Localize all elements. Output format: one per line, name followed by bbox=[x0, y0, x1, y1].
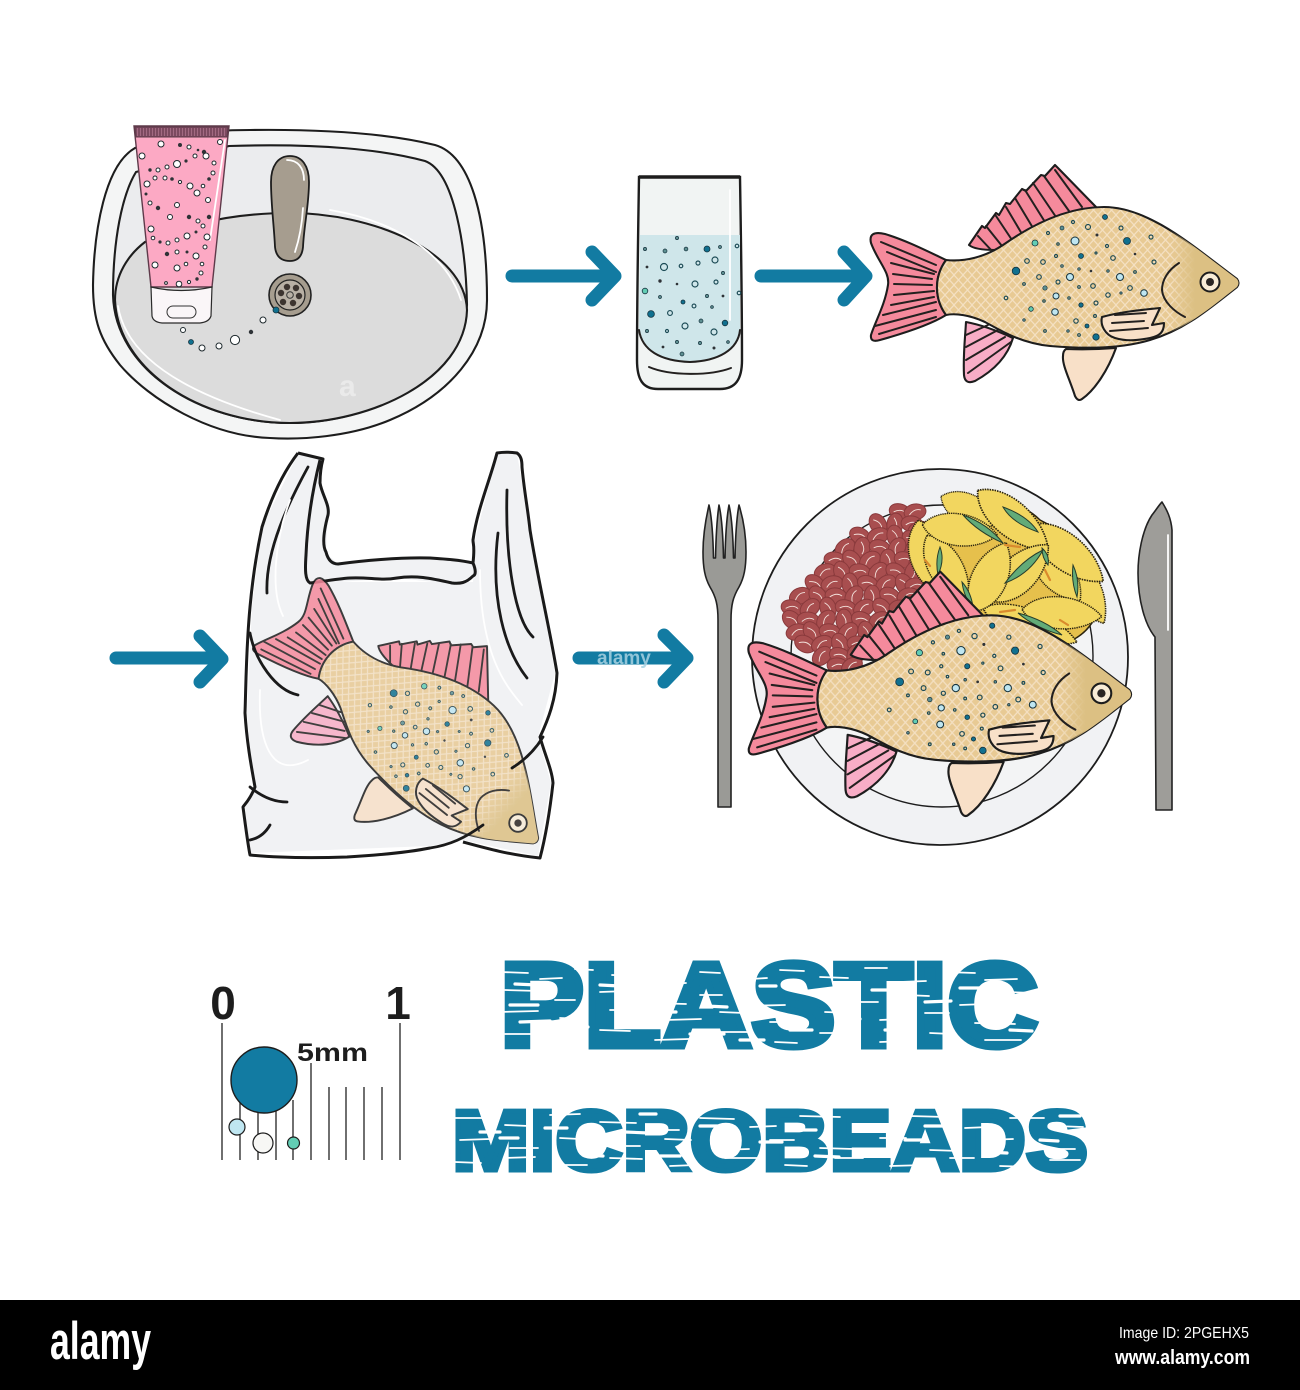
bag handle cut-out bbox=[320, 450, 497, 564]
bag outline bbox=[243, 452, 557, 858]
scale tick lines bbox=[222, 1023, 400, 1160]
plate bbox=[752, 469, 1128, 845]
title bbox=[452, 939, 1088, 1189]
knife bbox=[1138, 502, 1172, 810]
glass beads bbox=[642, 236, 741, 356]
size scale: 0 to 1 with 5mm mark bbox=[210, 977, 411, 1160]
panel: sink with exfoliating tube bbox=[93, 126, 487, 439]
drain bbox=[269, 274, 311, 316]
faucet handle bbox=[271, 156, 309, 261]
arrow: fish to plastic bag bbox=[116, 636, 222, 682]
sink basin bbox=[93, 130, 487, 439]
arrow: sink to glass bbox=[512, 252, 615, 300]
arrow: glass to fish bbox=[761, 252, 866, 300]
website: www.alamy.com bbox=[1114, 1347, 1250, 1369]
glass rim bbox=[639, 175, 740, 179]
heading: MICROBEADS: MICROBEADS bbox=[452, 1094, 1088, 1189]
left handle fill bbox=[262, 454, 327, 580]
panel: dinner plate bbox=[703, 469, 1172, 845]
right handle fill bbox=[473, 454, 530, 600]
glass highlight bbox=[729, 190, 731, 320]
rear band fill bbox=[310, 552, 476, 584]
large teal bead bbox=[231, 1047, 297, 1113]
fish inside bag bbox=[214, 530, 611, 921]
alamy logo: alamy bbox=[50, 1312, 151, 1371]
panel: plastic bag with fish bbox=[214, 450, 611, 921]
glass body bbox=[637, 177, 742, 389]
heading: PLASTIC: PLASTIC bbox=[500, 939, 1038, 1072]
arrow: bag to plate bbox=[579, 635, 687, 682]
fork bbox=[703, 505, 746, 807]
microbead trail to drain bbox=[180, 307, 279, 351]
fish with microbeads bbox=[871, 165, 1238, 400]
label 1: 1 bbox=[385, 977, 411, 1029]
bag body bbox=[245, 454, 555, 856]
glass inner lines bbox=[639, 330, 740, 374]
footer bar bbox=[0, 1300, 1300, 1390]
watermark letter: a bbox=[339, 370, 356, 403]
white bead bbox=[253, 1133, 273, 1153]
water bbox=[639, 235, 740, 362]
watermark on arrow: alamy bbox=[597, 648, 651, 669]
toothpaste tube bbox=[134, 126, 229, 323]
mint bead bbox=[288, 1137, 300, 1149]
light blue bead bbox=[229, 1119, 245, 1135]
label 5mm: 5mm bbox=[297, 1039, 368, 1067]
beans bbox=[779, 501, 932, 678]
image id: Image ID: 2PGEHX5 bbox=[1119, 1325, 1249, 1342]
fish on plate bbox=[748, 572, 1131, 816]
label 0: 0 bbox=[210, 977, 236, 1029]
bag folds bbox=[250, 467, 543, 848]
potato wedges with rosemary bbox=[901, 477, 1119, 656]
panel: glass of water with microbeads bbox=[637, 177, 742, 389]
distressed texture streaks bbox=[455, 968, 1083, 1167]
